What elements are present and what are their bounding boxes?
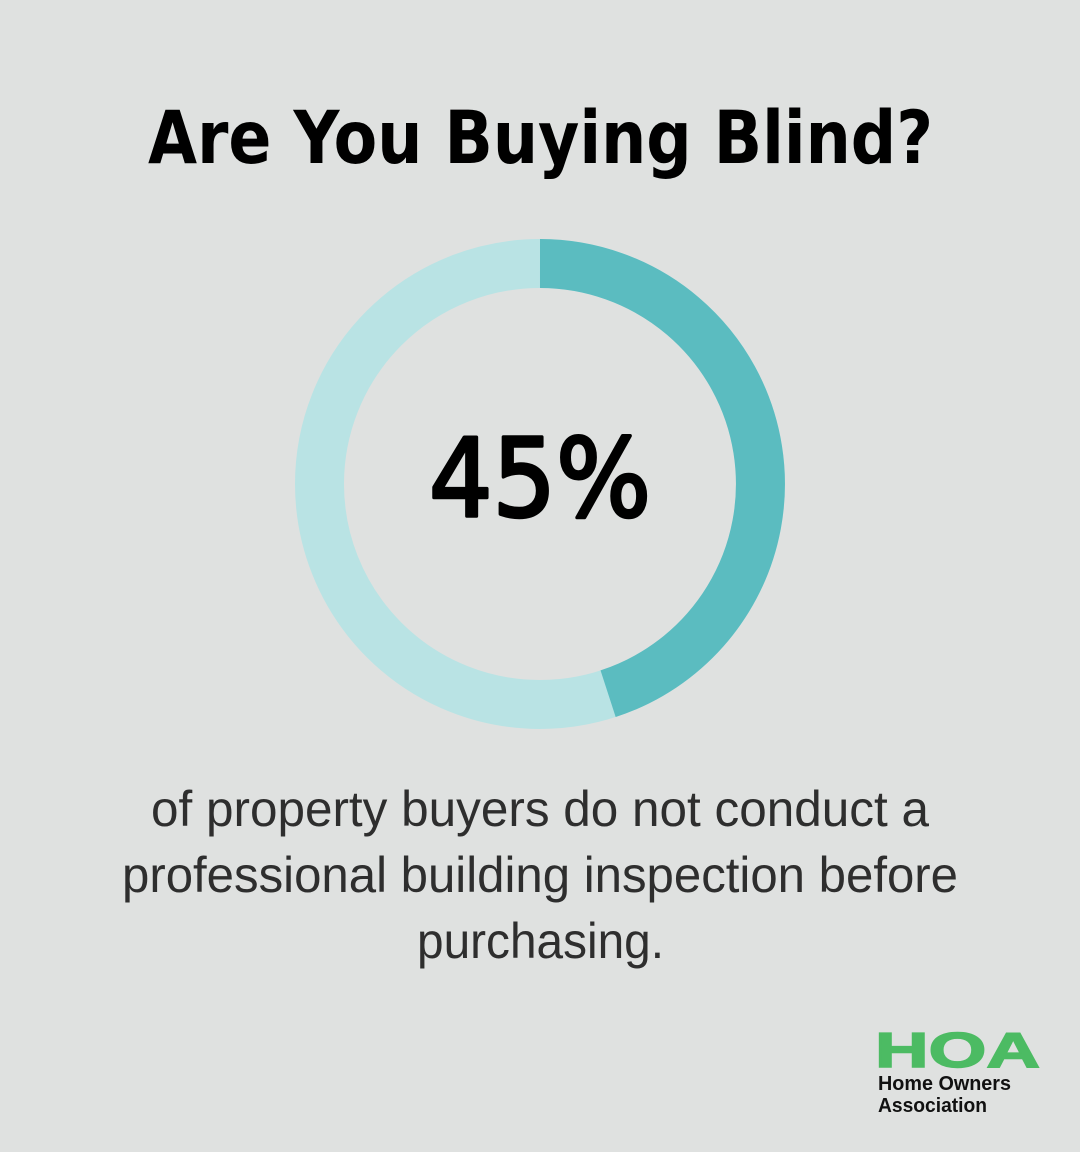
- donut chart: 45%: [320, 264, 760, 704]
- logo: HOA Home Owners Association: Association: [878, 1095, 987, 1117]
- logo: HOA Home Owners Association: [875, 1024, 1040, 1117]
- title: Are You Buying Blind?: [148, 96, 933, 181]
- logo: HOA Home Owners Association: HOA: [875, 1024, 1040, 1078]
- logo: HOA Home Owners Association: Home Owners: [878, 1073, 1011, 1095]
- description text: [122, 781, 958, 969]
- description text: of property buyers do not conduct a: [151, 781, 929, 837]
- big statistic: 45%: [429, 417, 651, 542]
- description text: purchasing.: [417, 913, 664, 969]
- description text: professional building inspection before: [122, 847, 958, 903]
